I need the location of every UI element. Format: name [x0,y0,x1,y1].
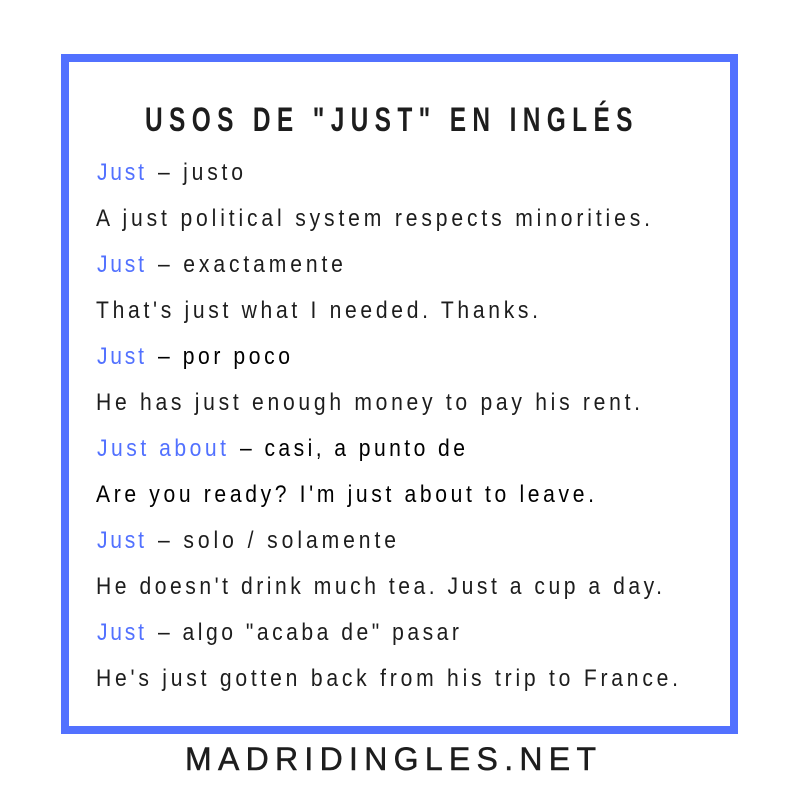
usage 5 example: He doesn't drink much tea. Just a cup a day. [96,573,662,599]
panel: blue frame [65,58,734,730]
usage 1 heading [97,159,243,185]
usage 4 heading: Just about [97,435,227,461]
usage 4 example: Are you ready? I'm just about to leave. [96,481,594,507]
footer: website name: MADRIDINGLES.NET [185,741,596,777]
text block: usage list [96,159,678,691]
usage 3 heading [97,343,290,369]
usage 3 heading: – por poco [158,343,290,369]
usage 1 heading: – justo [158,159,243,185]
usage 3 example: He has just enough money to pay his rent. [96,389,640,415]
usage 3 heading: Just [97,343,145,369]
usage 4 heading: – casi, a punto de [240,435,465,461]
usage 6 heading: Just [97,619,145,645]
usage 2 heading: – exactamente [158,251,343,277]
usage 6 heading: – algo "acaba de" pasar [158,619,459,645]
usage 2 heading: Just [97,251,145,277]
usage 4 heading [97,435,465,461]
usage 2 example: That's just what I needed. Thanks. [96,297,538,323]
title: USOS DE "JUST" EN INGLÉS [145,100,632,139]
usage 1 heading: Just [97,159,145,185]
usage 1 example: A just political system respects minorities. [96,205,650,231]
usage 5 heading: – solo / solamente [158,527,396,553]
usage 6 example: He's just gotten back from his trip to France. [96,665,678,691]
usage 5 heading: Just [97,527,145,553]
